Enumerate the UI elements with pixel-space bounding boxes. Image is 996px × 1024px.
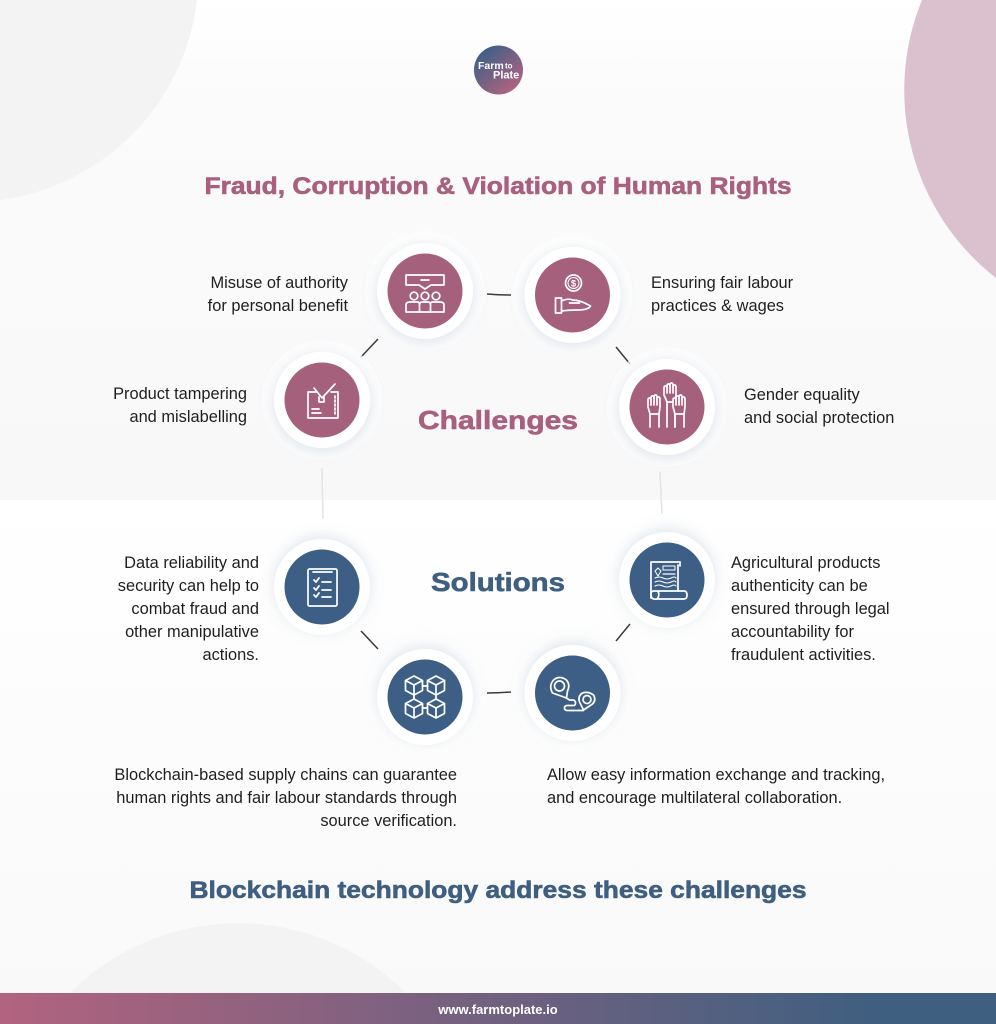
panel: solutions cycle	[274, 532, 715, 757]
connector lines: challenges	[322, 294, 662, 519]
text: misuse of authority: for personal benefit	[208, 297, 348, 315]
text: blockchain supply chains: human rights and fair labour standards through	[116, 789, 457, 807]
text: data reliability: actions.	[202, 646, 259, 664]
footer bar	[0, 993, 996, 1024]
text: gender equality: and social protection	[744, 409, 894, 427]
text: information exchange: and encourage multilateral collaboration.	[547, 789, 842, 807]
text: blockchain supply chains: source verification.	[320, 812, 457, 830]
text: authenticity: ensured through legal	[731, 600, 890, 618]
node: fair labour icon	[512, 235, 632, 355]
text: tampering: and mislabelling	[129, 408, 247, 426]
logo: Plate	[493, 70, 519, 82]
text: information exchange: Allow easy information exchange and tracking,	[547, 766, 885, 784]
background: lower section	[0, 500, 996, 993]
text: data reliability: Data reliability and	[124, 554, 259, 572]
closing heading: Blockchain technology address these challenges	[190, 877, 807, 904]
decorative circle: top left	[0, 0, 197, 200]
panel: challenges cycle	[262, 231, 727, 467]
node: fair labour icon: $	[571, 278, 577, 290]
text: tampering: Product tampering	[113, 385, 247, 403]
node: blockchain icon	[365, 637, 485, 757]
heading: solutions: Solutions	[431, 567, 565, 597]
footer bar: www.farmtoplate.io	[437, 1002, 558, 1017]
node: data reliability icon	[274, 539, 370, 635]
node: misuse of authority icon	[365, 231, 485, 351]
node: tampering icon	[262, 340, 382, 460]
text: blockchain supply chains: Blockchain-based supply chains can guarantee	[114, 766, 457, 784]
title: Fraud, Corruption & Violation of Human Rights	[204, 173, 792, 200]
text: fair labour: Ensuring fair labour	[651, 274, 794, 292]
node: authenticity icon	[619, 532, 715, 628]
text: authenticity: fraudulent activities.	[731, 646, 876, 664]
logo: to	[505, 62, 513, 70]
heading: challenges: Challenges	[418, 405, 578, 435]
text: fair labour: practices & wages	[651, 297, 784, 315]
decorative circle: top right	[904, 0, 996, 278]
text: data reliability: security can help to	[118, 577, 259, 595]
text: authenticity: accountability for	[731, 623, 855, 641]
text: authenticity: authenticity can be	[731, 577, 868, 595]
node: gender equality icon	[607, 347, 727, 467]
logo: Farm	[478, 60, 504, 72]
decorative circle: bottom	[70, 923, 406, 993]
connector lines: solutions	[361, 624, 630, 693]
text: misuse of authority: Misuse of authority	[210, 274, 349, 292]
text: data reliability: other manipulative	[125, 623, 259, 641]
background: upper section	[0, 0, 996, 500]
logo	[474, 46, 523, 94]
node: tracking icon	[512, 633, 632, 753]
text: data reliability: combat fraud and	[131, 600, 259, 618]
text: authenticity: Agricultural products	[731, 554, 880, 572]
text: gender equality: Gender equality	[744, 386, 861, 404]
